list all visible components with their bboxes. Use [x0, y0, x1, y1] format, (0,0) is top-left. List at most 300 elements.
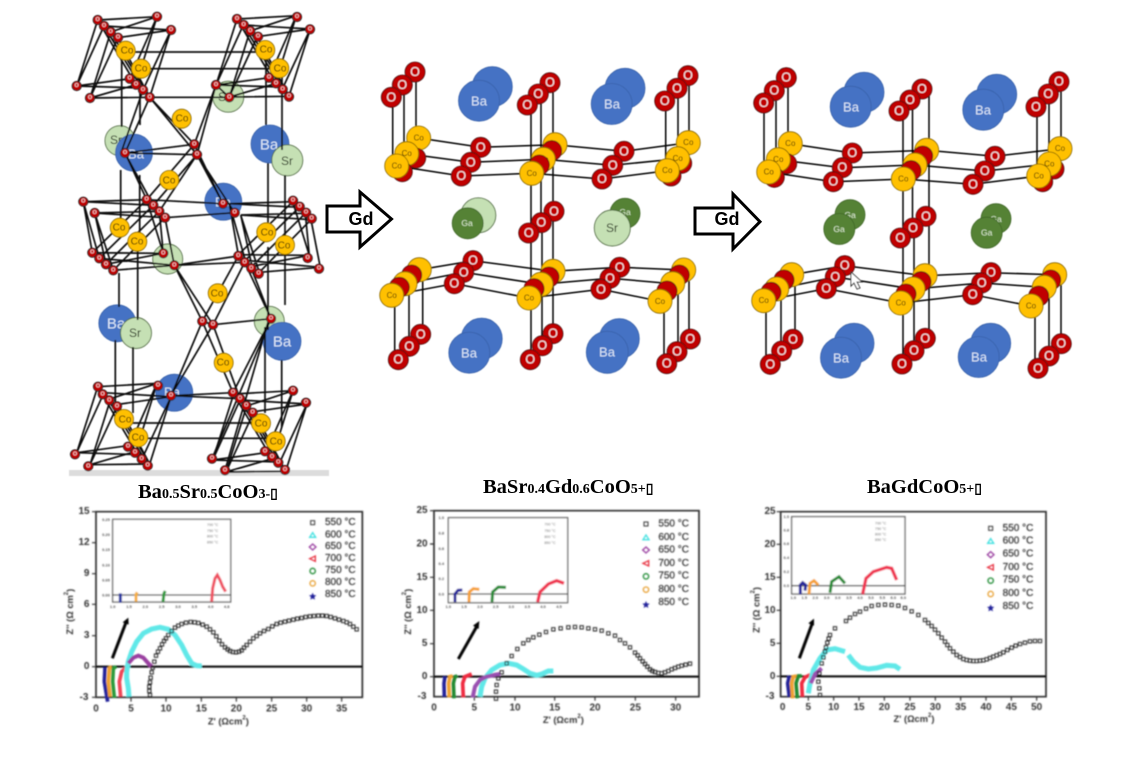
inset plot [784, 514, 907, 600]
small O labels: O [101, 391, 106, 397]
axis tick labels: 5 [472, 702, 478, 713]
inset plot: 6.0 [891, 595, 897, 600]
small O labels: O [145, 197, 150, 203]
chart: impedance spectra BaGdCoO5: Z'' (Ω cm [752, 594, 762, 633]
axis tick labels: 10 [416, 605, 428, 616]
axis tick labels: 10 [764, 605, 776, 616]
atoms: O [837, 161, 847, 175]
atoms: Co [387, 291, 397, 300]
small O labels: O [141, 87, 146, 93]
inset plot: 0.8 [784, 527, 790, 532]
atoms: O [662, 357, 672, 371]
inset plot: 0.15 [102, 547, 111, 552]
small O labels: O [88, 95, 93, 101]
inset plot: 0.00 [102, 592, 111, 597]
small O labels: O [111, 267, 116, 273]
small O labels: O [86, 463, 91, 469]
arrow: Gd substitution step 1 [327, 192, 392, 247]
inset plot: 1.5 [126, 604, 133, 609]
axis tick labels: 0 [780, 702, 786, 713]
small O labels: O [161, 250, 166, 256]
atoms: O [549, 204, 559, 218]
small O labels: O [200, 318, 205, 324]
small O labels: O [115, 403, 120, 409]
small O labels: O [155, 14, 160, 20]
inset plot: 0.0 [784, 583, 790, 588]
data curves [788, 605, 1040, 698]
atoms: O [683, 69, 693, 83]
plot frame and zero line [430, 511, 699, 701]
atoms: O [980, 164, 990, 178]
atoms: Co [524, 294, 535, 302]
large spheres: Ba and Sr: Ba [215, 194, 232, 210]
inset plot: 1.0 [791, 595, 797, 600]
small O labels: O [276, 460, 281, 466]
atoms: O [769, 84, 779, 98]
atoms: O [685, 332, 695, 346]
inset plot: 800 °C [875, 533, 887, 537]
inset plot: 0.05 [102, 577, 111, 582]
inset plot: 750 °C [207, 529, 219, 533]
atoms: O [525, 353, 535, 367]
bonds: octahedra and vertical struts [77, 16, 320, 472]
inset plot: 0.8 [439, 530, 445, 535]
axis tick labels: 0 [93, 703, 99, 714]
arrow: Gd substitution step 1: Gd [348, 209, 374, 229]
large spheres: Ba and Sr: Ba [164, 384, 181, 400]
inset plot: 800 °C [544, 535, 556, 539]
small O labels: O [274, 80, 279, 86]
inset plot: 1.0 [446, 604, 452, 609]
inset plot: 0.2 [784, 569, 790, 574]
arrow [112, 618, 129, 658]
atoms: O [894, 104, 904, 118]
axis tick labels: 30 [930, 702, 941, 713]
atoms: O [672, 345, 682, 359]
atoms: Ba [971, 350, 988, 364]
atoms: Co [673, 154, 683, 163]
atoms: Co [1055, 144, 1066, 153]
axis tick labels: 0 [84, 661, 90, 672]
axis tick labels: 12 [78, 537, 90, 548]
atoms: Ga [833, 224, 845, 234]
small O labels: O [257, 271, 262, 277]
axis tick labels: 15 [196, 703, 207, 714]
axis tick labels: -3 [766, 691, 775, 702]
legend: 750 °C [1003, 574, 1033, 585]
inset plot: 3.0 [824, 595, 830, 600]
inset plot: 0.25 [102, 517, 111, 522]
atoms: Co [1034, 172, 1044, 180]
legend: 550 °C [1003, 523, 1033, 534]
large spheres: Ba and Sr: Ba [273, 334, 292, 350]
bonds [392, 72, 689, 364]
small O labels: O [306, 255, 311, 261]
data curves [104, 616, 357, 702]
legend: 850 °C [1003, 601, 1033, 612]
inset plot: 1.0 [439, 515, 445, 520]
small O labels: O [109, 29, 114, 35]
atoms: O [545, 76, 555, 90]
small O labels: O [283, 467, 288, 473]
small Co atoms: Co [270, 436, 283, 448]
inset plot: 800 °C [207, 535, 219, 539]
atoms: Co [402, 149, 412, 158]
atoms: O [619, 144, 629, 158]
small O labels: O [233, 210, 238, 216]
atoms: O [905, 93, 915, 107]
small O labels: O [269, 316, 274, 322]
atoms: Ba [461, 346, 478, 360]
inset plot: 1.5 [461, 604, 468, 609]
inset plot: 700 °C [207, 523, 219, 527]
atoms: O [897, 357, 907, 371]
inset plot: 4.0 [857, 595, 864, 600]
small O labels: O [73, 451, 78, 457]
inset plot: 4.5 [556, 604, 563, 609]
legend: 750 °C [658, 570, 689, 581]
atoms: O [393, 353, 403, 367]
atoms: Co [392, 162, 402, 170]
small O labels: O [134, 82, 139, 88]
inset plot: 750 °C [544, 529, 556, 533]
inset plot: 2.0 [477, 604, 484, 609]
heading: BaGdCoO5: BaGdCoO5+▯ [867, 476, 982, 498]
atoms [380, 62, 700, 374]
axis tick labels [416, 505, 682, 713]
small O labels: O [104, 261, 109, 267]
atoms: O [537, 339, 547, 353]
atoms: Ba [843, 100, 860, 114]
small O labels: O [97, 255, 102, 261]
atoms: O [968, 177, 978, 191]
chart: impedance spectra Ba0.5Sr0.5CoO3: ) [65, 589, 75, 592]
axis tick labels: 45 [1006, 702, 1017, 713]
legend [987, 523, 1033, 612]
atoms: O [765, 357, 775, 371]
axis tick labels: 5 [806, 702, 812, 713]
small Co atoms: Co [119, 414, 132, 426]
atoms: Ba [833, 350, 850, 366]
atoms: O [977, 276, 987, 290]
atoms: Ga [981, 228, 993, 238]
small O labels: O [163, 215, 168, 221]
small Co atoms: Co [131, 236, 144, 248]
inset plot [439, 515, 568, 609]
atoms: Co [662, 166, 673, 175]
atoms: O [917, 82, 927, 96]
axis tick labels: 15 [853, 702, 865, 713]
inset plot: 0.4 [784, 555, 790, 560]
axis titles: Z' (Ωcm [893, 714, 928, 724]
atoms: Co [764, 168, 774, 176]
small O labels: O [236, 253, 241, 259]
large spheres: Ba and Sr: Ba [128, 146, 145, 162]
legend: 600 °C [1003, 535, 1033, 546]
axis tick labels: 15 [416, 572, 428, 583]
atoms: Co [896, 298, 906, 308]
legend: 550 °C [658, 518, 689, 529]
atoms: O [781, 71, 791, 85]
small O labels: O [172, 262, 177, 268]
small O labels: O [281, 86, 286, 92]
atoms: O [788, 332, 798, 346]
atoms: Ba [604, 96, 621, 112]
axis tick labels [78, 506, 348, 714]
inset plot: 0.10 [102, 562, 111, 567]
small O labels: O [169, 27, 174, 33]
inset plot: 5.5 [880, 595, 886, 600]
inset plot: 3.0 [835, 595, 841, 600]
axis titles: 2 [928, 713, 932, 719]
small O labels: O [96, 384, 101, 390]
small O labels: O [81, 199, 86, 205]
atoms: O [660, 94, 670, 108]
small Co atoms: Co [132, 432, 145, 444]
atoms: Co [773, 155, 784, 164]
small O labels: O [151, 202, 156, 208]
chart: impedance spectra BaSr0.4Gd0.6CoO5: 2 [402, 591, 408, 595]
small O labels: O [148, 94, 153, 100]
atoms: O [921, 209, 931, 223]
atoms: Co [414, 134, 424, 142]
atoms: O [821, 282, 831, 296]
small O labels: O [244, 403, 249, 409]
small O labels: O [287, 94, 292, 100]
inset plot: 0.4 [439, 561, 445, 566]
axis tick labels: 20 [416, 538, 428, 549]
small O labels: O [270, 454, 275, 460]
axis tick labels: 15 [78, 506, 90, 517]
axis tick labels: 0 [770, 671, 776, 682]
axis tick labels: 15 [549, 702, 561, 713]
small O labels: O [107, 397, 112, 403]
icon: mouse cursor [851, 272, 862, 289]
atoms: Co [759, 296, 769, 305]
arrow: Gd substitution step 2: Gd [714, 209, 740, 229]
atoms: O [1056, 337, 1066, 351]
axis tick labels: 25 [266, 703, 278, 714]
atoms: Co [785, 139, 796, 148]
axis tick labels: 10 [160, 703, 172, 714]
atoms: O [920, 331, 930, 345]
small O labels: O [93, 210, 98, 216]
atoms: O [968, 288, 978, 302]
inset plot: 700 °C [875, 521, 887, 525]
inset plot: 4.0 [540, 604, 547, 609]
axis tick labels: 6 [84, 599, 90, 610]
small O labels: O [238, 396, 243, 402]
atoms: O [476, 140, 486, 154]
panel: BaGdCoO5 layered structure [752, 68, 1072, 378]
atoms: O [608, 158, 618, 172]
small Co atoms: Co [135, 64, 148, 74]
small O labels: O [126, 444, 131, 450]
legend: 550 °C [325, 517, 356, 528]
legend: 700 °C [325, 553, 356, 564]
small O labels: O [242, 22, 247, 28]
chart: impedance spectra BaGdCoO5 [751, 506, 1046, 724]
chart: impedance spectra Ba0.5Sr0.5CoO3 [64, 506, 362, 727]
atoms: Ga [990, 214, 1002, 224]
inset plot: 700 °C [544, 522, 556, 526]
plot frame and zero line [92, 512, 362, 702]
axis titles: Z' (Ωcm [543, 715, 577, 725]
small O labels: O [251, 410, 256, 416]
arrow: Gd substitution step 2 [695, 194, 760, 249]
axis tick labels: 20 [764, 539, 776, 550]
arrow [799, 619, 814, 658]
atoms: O [1033, 361, 1043, 375]
axis tick labels: 50 [1031, 702, 1043, 713]
axis tick labels: 25 [764, 506, 776, 517]
small O labels: O [223, 467, 228, 473]
atoms: Ba [975, 102, 992, 118]
inset plot: 3.0 [175, 604, 182, 609]
atoms: O [1031, 100, 1041, 114]
legend [642, 518, 689, 608]
axis tick labels: 30 [670, 702, 682, 713]
atoms: Co [1044, 160, 1055, 168]
inset plot: 0.0 [439, 591, 445, 596]
inset plot: 0.6 [439, 546, 445, 551]
small O labels: O [243, 259, 248, 265]
inset plot: 1.0 [784, 514, 790, 519]
inset plot: 3.0 [509, 604, 515, 609]
small O labels: O [210, 456, 215, 462]
atoms: O [1044, 349, 1054, 363]
small O labels: O [221, 201, 226, 207]
legend: 800 °C [325, 577, 356, 588]
atoms: O [456, 169, 466, 183]
small O atoms [70, 12, 324, 475]
atoms: O [404, 339, 414, 353]
inset plot: 2.5 [493, 604, 499, 609]
legend: 750 °C [325, 565, 356, 576]
atoms: O [397, 78, 407, 92]
small O labels: O [308, 26, 313, 32]
atoms: O [522, 98, 532, 112]
small O labels: O [295, 14, 300, 20]
axis tick labels: 5 [128, 703, 134, 714]
axis tick labels: 10 [828, 702, 840, 713]
small O labels: O [146, 463, 151, 469]
legend: 850 °C [325, 589, 356, 600]
atoms: Co [1026, 302, 1037, 310]
small O labels: O [231, 390, 236, 396]
small Co atoms: Co [255, 418, 268, 430]
atoms: Co [655, 297, 666, 306]
small Co atoms: Co [274, 64, 287, 74]
chart: impedance spectra BaSr0.4Gd0.6CoO5 [402, 505, 699, 725]
small O labels: O [75, 83, 80, 89]
axis tick labels [764, 506, 1043, 713]
small O labels: O [227, 94, 232, 100]
legend: 650 °C [658, 544, 689, 555]
inset plot [102, 517, 231, 609]
axis tick labels: 0 [422, 671, 428, 682]
atoms: Ga [844, 210, 856, 220]
legend: 800 °C [1003, 588, 1033, 599]
legend: 650 °C [325, 541, 356, 552]
inset plot: 6.0 [901, 595, 907, 600]
atoms: Co [527, 169, 537, 178]
axis titles: ) [246, 717, 249, 727]
atoms: O [672, 81, 682, 95]
panel: Ba0.5Sr0.5CoO3 crystal structure [69, 12, 329, 476]
atoms: O [990, 149, 1000, 163]
atoms: O [909, 344, 919, 358]
small O labels: O [169, 393, 174, 399]
axis tick labels: 20 [879, 702, 890, 713]
atoms: O [847, 146, 857, 160]
small Co atoms: Co [176, 114, 189, 124]
axis tick labels: -3 [418, 691, 427, 702]
atoms: O [533, 87, 543, 101]
atoms: O [596, 282, 606, 296]
inset plot: 1.5 [802, 595, 808, 600]
axis titles: ) [581, 715, 584, 725]
inset plot: 2.5 [159, 604, 165, 609]
panel: BaSr0.4Gd0.6CoO5 layered structure [380, 62, 700, 374]
small O labels: O [102, 23, 107, 29]
atoms: O [548, 327, 558, 341]
arrow [458, 621, 479, 659]
inset plot: 850 °C [875, 538, 887, 542]
axis tick labels: 35 [955, 702, 967, 713]
small O labels: O [298, 204, 303, 210]
chart: impedance spectra Ba0.5Sr0.5CoO3: 2 [64, 591, 70, 595]
inset plot: 1.0 [110, 604, 116, 609]
small O labels: O [128, 76, 133, 82]
atoms: O [908, 221, 918, 235]
axis tick labels: -3 [80, 692, 89, 703]
legend: 650 °C [1003, 548, 1033, 559]
large spheres: Ba and Sr: Ba [260, 136, 279, 154]
legend [309, 517, 356, 600]
small O labels: O [267, 75, 272, 81]
small O labels: O [214, 82, 219, 88]
heading: BaSr0.4Gd0.6CoO5: BaSr0.4Gd0.6CoO5+▯ [483, 476, 653, 498]
inset plot: 3.5 [525, 604, 531, 609]
inset plot: 0.6 [784, 541, 790, 546]
axis tick labels: 10 [509, 702, 521, 713]
small O labels: O [140, 456, 145, 462]
axis tick labels: 25 [630, 702, 641, 713]
inset plot: 850 °C [544, 541, 556, 545]
atoms: O [597, 172, 607, 186]
axis tick labels: 20 [589, 702, 601, 713]
axis tick labels: 5 [770, 638, 776, 649]
atoms: O [605, 271, 615, 285]
small O labels: O [304, 400, 309, 406]
chart: impedance spectra BaSr0.4Gd0.6CoO5: ) [403, 589, 413, 592]
atoms: Co [538, 155, 549, 164]
chart: impedance spectra BaGdCoO5: 2 [751, 590, 757, 594]
inset plot: 5.0 [868, 595, 875, 600]
axis tick labels: 15 [764, 572, 776, 583]
small O labels: O [192, 141, 197, 147]
inset plot: 3.5 [192, 604, 198, 609]
large spheres: Ba and Sr: Ba [107, 316, 126, 332]
small O labels: O [304, 210, 309, 216]
legend: 850 °C [658, 597, 689, 608]
small Co atoms: Co [121, 46, 134, 56]
small O labels: O [195, 152, 200, 158]
atoms: O [828, 175, 838, 189]
large spheres: Ba and Sr: Sr [110, 133, 122, 147]
axis tick labels: 35 [336, 703, 348, 714]
